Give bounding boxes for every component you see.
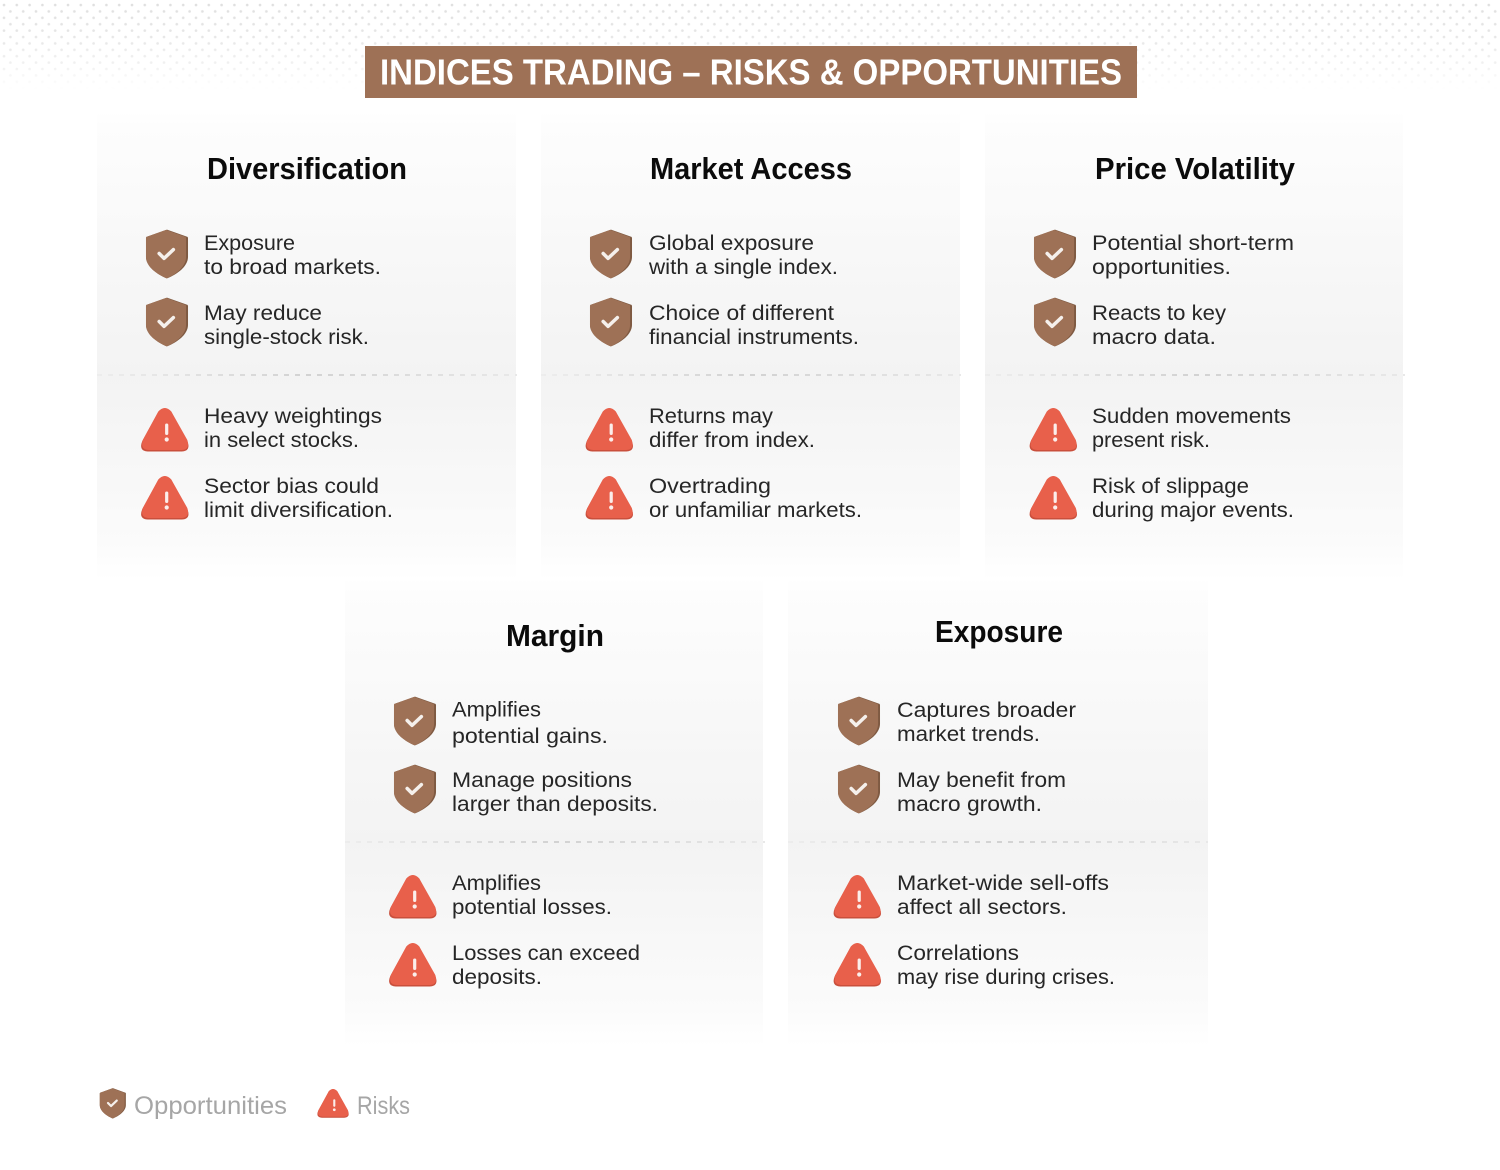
legend [100, 1088, 410, 1120]
risk: amplifies losses: potential losses. [452, 895, 612, 919]
panel: Market Access [541, 112, 961, 580]
risk: sell-offs [834, 871, 1109, 919]
opportunity: short-term: opportunities. [1092, 255, 1231, 279]
opportunity: manage positions: larger than deposits. [452, 792, 658, 816]
risk: sudden movements: Sudden movements [1092, 404, 1291, 428]
legend: Opportunities [134, 1092, 287, 1120]
opportunity: macro data: macro data. [1092, 325, 1216, 349]
risk: sell-offs: Market-wide sell-offs [897, 871, 1109, 895]
opportunity: macro growth: macro growth. [897, 792, 1042, 816]
risk: returns differ [586, 404, 815, 452]
opportunity: instruments: financial instruments. [649, 325, 859, 349]
legend: Risks [357, 1092, 410, 1120]
risk: sector bias: limit diversification. [204, 498, 393, 522]
heading: Exposure: Exposure [935, 614, 1063, 649]
risk: sell-offs: affect all sectors. [897, 895, 1067, 919]
opportunity: global exposure: with a single index. [648, 255, 838, 279]
opportunity: manage positions: Manage positions [452, 768, 632, 792]
risk: slippage: Risk of slippage [1092, 474, 1249, 498]
heading: Diversification: Diversification [207, 151, 407, 186]
opportunity: macro growth: May benefit from [897, 768, 1066, 792]
opportunity: single-stock risk [146, 298, 369, 349]
opportunity: short-term: Potential short-term [1092, 231, 1294, 255]
opportunity: macro data [1034, 298, 1226, 349]
panel: Exposure [788, 579, 1208, 1047]
heading: Market Access: Market Access [650, 151, 852, 186]
risk: sector bias: Sector bias could [204, 474, 379, 498]
risk: exceed deposits [389, 941, 640, 989]
risk: slippage: during major events. [1092, 498, 1294, 522]
risk: sudden movements: present risk. [1092, 428, 1210, 452]
opportunity: market trends: market trends. [897, 722, 1040, 746]
heading: Price Volatility: Price Volatility [1095, 151, 1296, 186]
title: INDICES TRADING – RISKS & OPPORTUNITIES [380, 52, 1122, 92]
risk: overtrading: Overtrading [649, 474, 771, 498]
risk: amplifies losses [389, 871, 612, 919]
opportunity: single-stock risk: single-stock risk. [204, 325, 369, 349]
risk: correlations: may rise during crises. [897, 965, 1115, 989]
opportunity: instruments: Choice of different [649, 301, 834, 325]
panel: Diversification [97, 112, 517, 580]
opportunity: single-stock risk: May reduce [204, 301, 322, 325]
opportunity: manage positions [394, 765, 658, 816]
risk: sector bias [141, 474, 393, 522]
opportunity: global exposure: Global exposure [649, 231, 814, 255]
panel: Price Volatility [985, 112, 1405, 580]
risk: slippage [1030, 474, 1294, 522]
risk: overtrading: or unfamiliar markets. [649, 498, 862, 522]
opportunity: instruments [590, 298, 859, 349]
risk: sudden movements [1030, 404, 1291, 452]
opportunity: market trends: Captures broader [897, 698, 1076, 722]
risk: overtrading [586, 474, 862, 522]
opportunity: broad markets: to broad markets. [204, 255, 381, 279]
opportunity: amplifies gains: potential gains. [452, 724, 608, 748]
risk: heavy weightings: Heavy weightings [204, 404, 382, 428]
icon: risks triangle [317, 1089, 349, 1118]
risk: amplifies losses: Amplifies [452, 871, 541, 895]
risk: heavy weightings [141, 404, 382, 452]
opportunity: broad markets [146, 230, 381, 279]
opportunity: broad markets: Exposure [204, 231, 295, 255]
risk: correlations: Correlations [897, 941, 1019, 965]
risk: correlations [834, 941, 1115, 989]
risk: returns differ: differ from index. [649, 428, 815, 452]
heading: Margin: Margin [506, 618, 604, 653]
opportunity: market trends [838, 697, 1076, 746]
opportunity: amplifies gains [394, 697, 608, 748]
risk: heavy weightings: in select stocks. [204, 428, 359, 452]
risk: exceed deposits: deposits. [452, 965, 542, 989]
risk: exceed deposits: Losses can exceed [452, 941, 640, 965]
panel: Margin [345, 579, 765, 1047]
risk: returns differ: Returns may [649, 404, 773, 428]
opportunity: macro growth [838, 765, 1066, 816]
opportunity: macro data: Reacts to key [1092, 301, 1226, 325]
opportunity: short-term [1034, 230, 1294, 279]
opportunity: amplifies gains: Amplifies [452, 698, 541, 722]
icon: opportunities shield [100, 1088, 126, 1118]
opportunity: global exposure [590, 230, 838, 279]
